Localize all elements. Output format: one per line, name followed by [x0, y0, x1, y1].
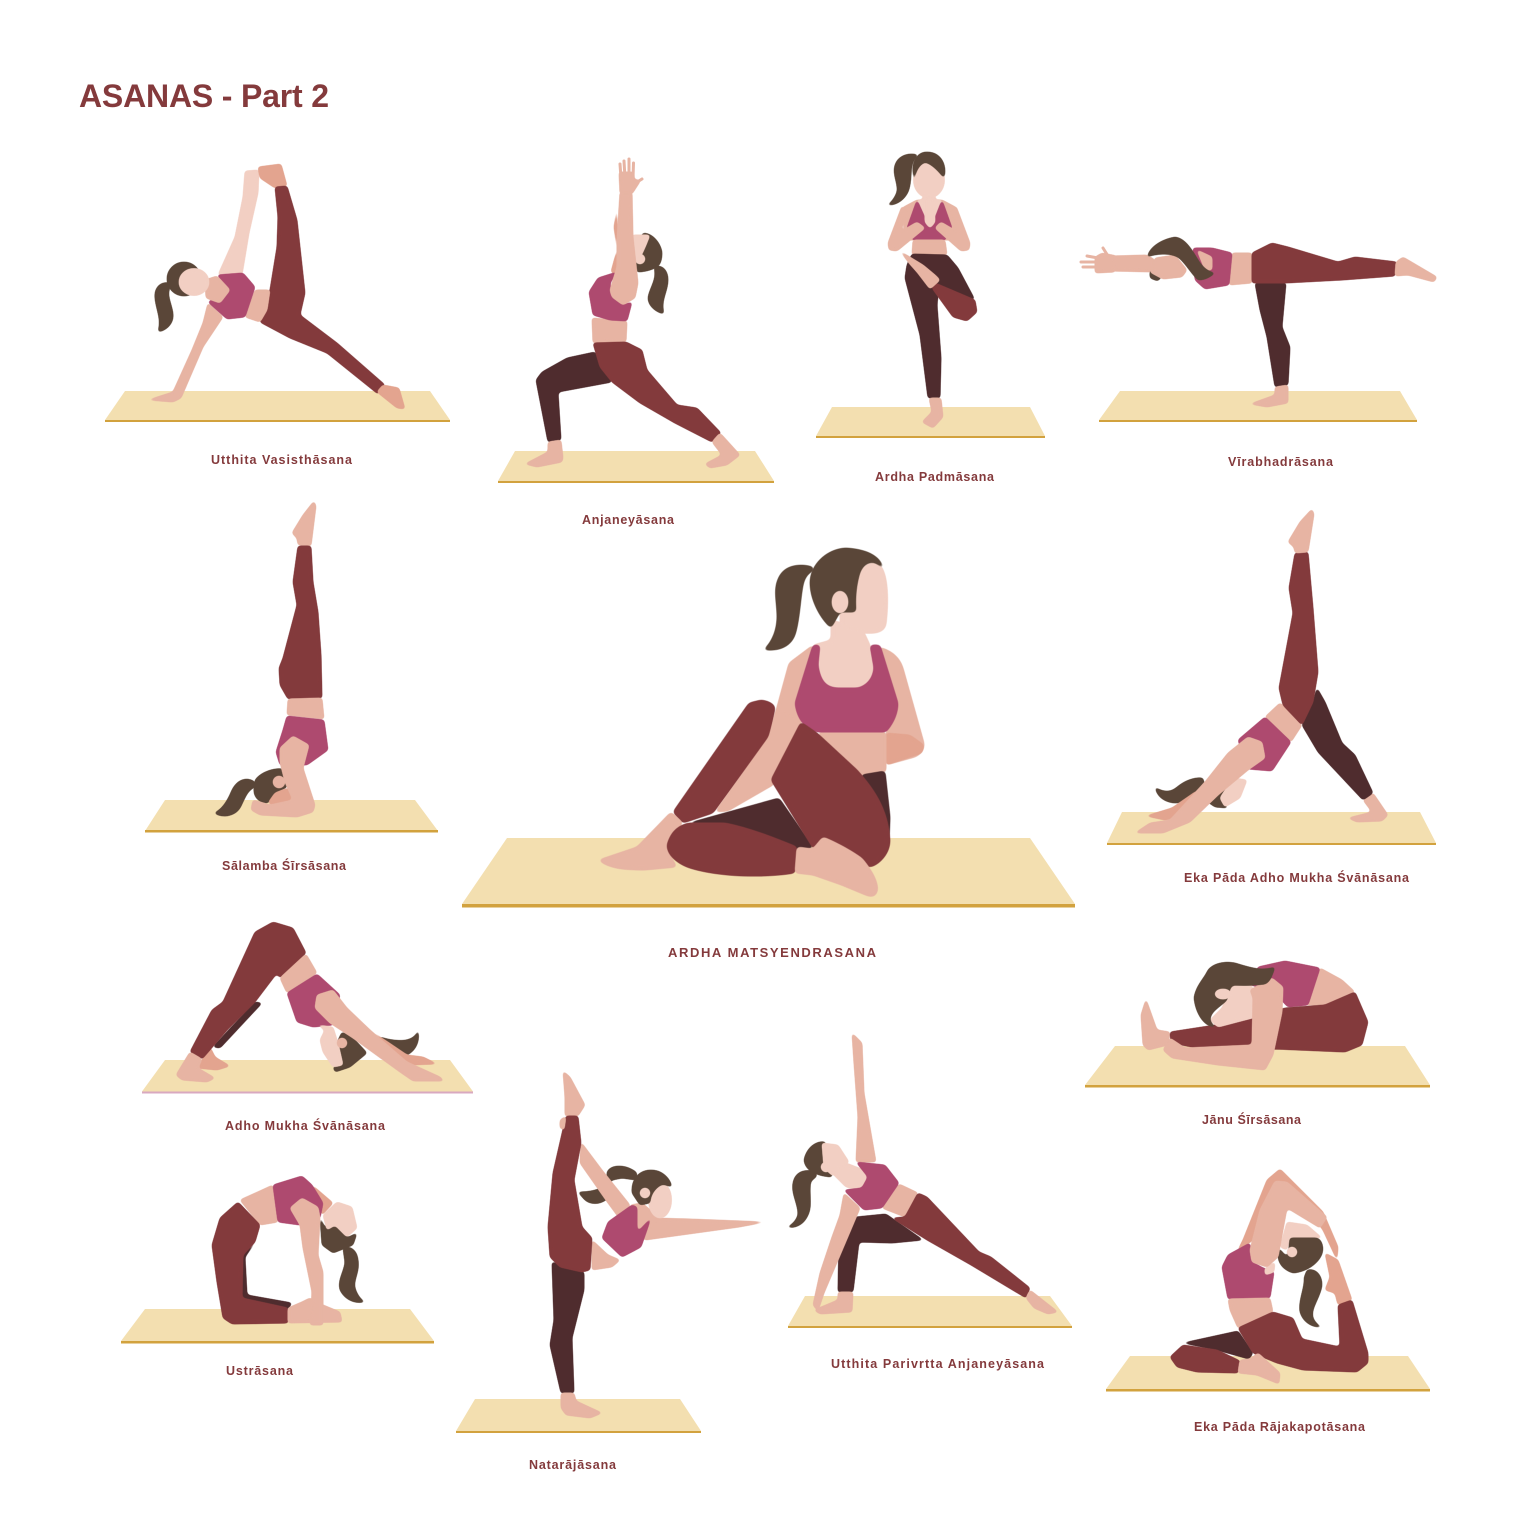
pose name: Eka Pāda Rājakapotāsana [1194, 1420, 1366, 1434]
pose name: Adho Mukha Śvānāsana [225, 1118, 386, 1133]
yoga mat [816, 407, 1045, 438]
pose name: Vīrabhadrāsana [1228, 455, 1334, 469]
figure: revolved side angle [787, 1033, 1058, 1314]
yoga mat [788, 1296, 1072, 1328]
pose: Ustrasana [121, 1176, 434, 1378]
pose: Eka Pada Adho Mukha Svanasana [1107, 509, 1436, 885]
pose name: Utthita Parivrtta Anjaneyāsana [831, 1357, 1045, 1371]
pose: Utthita Parivrtta Anjaneyasana [787, 1033, 1072, 1371]
pose: Anjaneyasana [498, 159, 774, 527]
figure: dancer pose [548, 1071, 766, 1418]
pose: Ardha Padmasana [816, 152, 1045, 484]
pose: Utthita Vasisthasana [105, 164, 450, 467]
figure: three-legged dog [1135, 509, 1388, 833]
pose: Janu Sirsasana [1085, 961, 1430, 1127]
pose: Salamba Sirsasana [145, 501, 438, 873]
figure: downward dog [176, 922, 444, 1082]
yoga mat [1099, 391, 1417, 422]
pose name: Eka Pāda Adho Mukha Śvānāsana [1184, 870, 1410, 885]
yoga mat [1107, 812, 1436, 845]
figure: side plank [148, 164, 405, 409]
pose name: Natarājāsana [529, 1458, 617, 1472]
yoga mat [1085, 1046, 1430, 1088]
pose name: Ardha Padmāsana [875, 470, 995, 484]
figure: half lotus balance [887, 152, 977, 428]
yoga mat [462, 838, 1075, 908]
yoga mat [121, 1309, 434, 1344]
pose name: Sālamba Śīrsāsana [222, 858, 347, 873]
pose name: Ustrāsana [226, 1364, 294, 1378]
pose name: Utthita Vasisthāsana [211, 453, 353, 467]
pose: Eka Pada Rajakapotasana [1106, 1169, 1430, 1434]
pose name: ARDHA MATSYENDRASANA [668, 945, 877, 960]
yoga mat [456, 1399, 701, 1433]
pose: Adho Mukha Svanasana [142, 922, 473, 1133]
yoga mat [145, 800, 438, 832]
pose name: Anjaneyāsana [582, 513, 675, 527]
pose: Ardha Matsyendrasana (main) [462, 548, 1075, 960]
pose: Natarajasana [456, 1071, 766, 1472]
figure: head to knee [1141, 961, 1368, 1070]
yoga mat [498, 451, 774, 483]
figure: high lunge [525, 159, 740, 468]
figure: headstand [214, 501, 328, 817]
yoga mat [105, 391, 450, 422]
figure: warrior three [1081, 237, 1437, 407]
yoga mat [1106, 1356, 1430, 1392]
figure: seated twist [598, 548, 924, 896]
figure: pigeon pose [1170, 1169, 1368, 1384]
pose: Virabhadrasana [1081, 237, 1437, 469]
yoga mat [142, 1060, 473, 1094]
pose name: Jānu Śīrsāsana [1202, 1112, 1302, 1127]
figure: camel pose [212, 1176, 365, 1325]
title: ASANAS - Part 2 [79, 78, 329, 114]
